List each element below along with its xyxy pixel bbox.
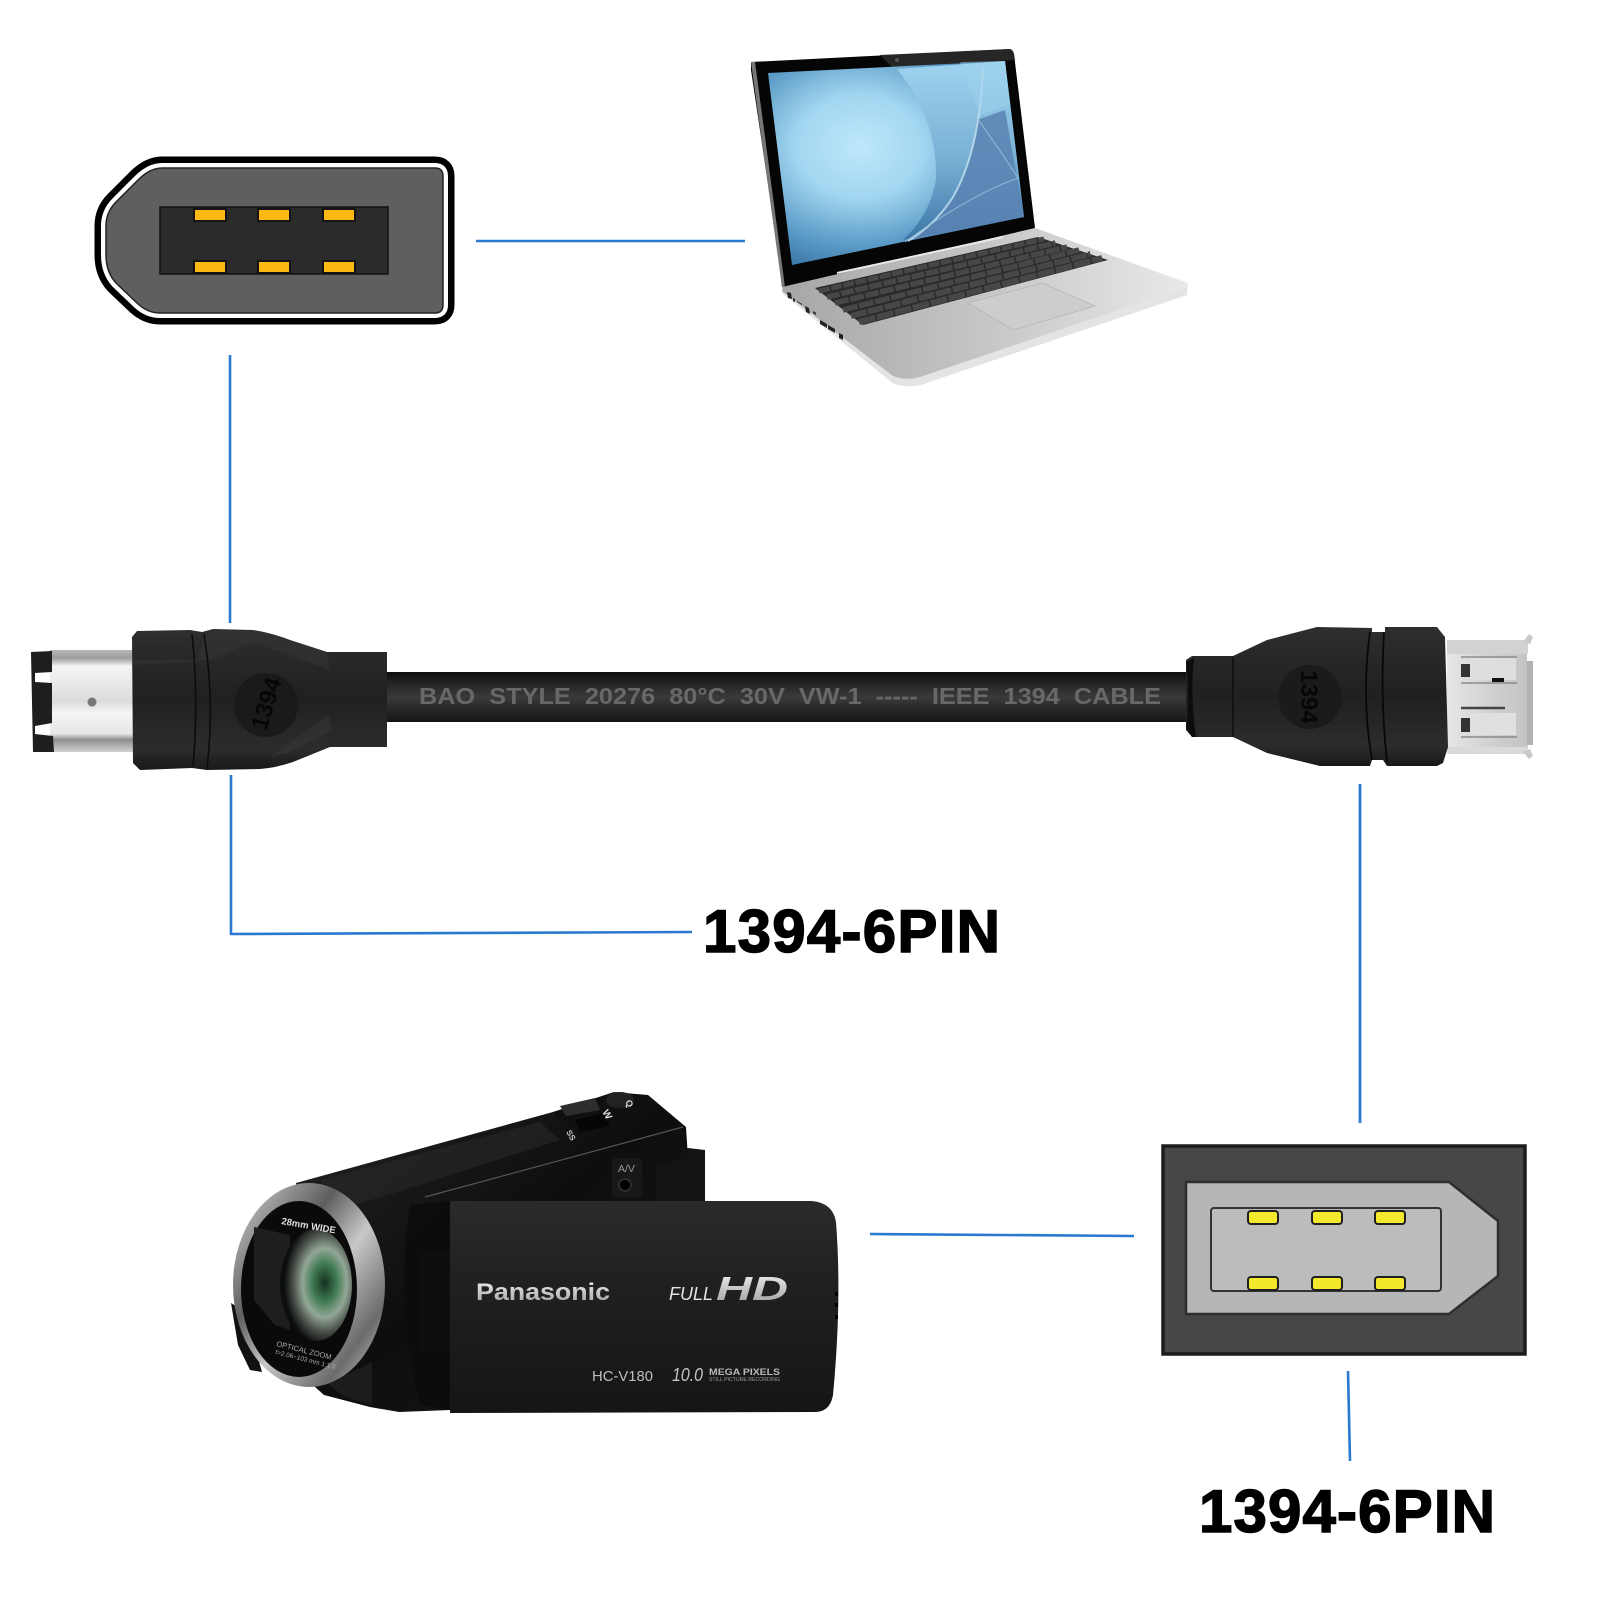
camcorder flip screen	[450, 1201, 838, 1413]
Panasonic logo: Panasonic	[476, 1279, 610, 1306]
camcorder top controls: SS	[564, 1128, 578, 1143]
camcorder A/V port	[612, 1158, 642, 1198]
camcorder lens face: f=2.06~103 mm 1:1.8	[275, 1349, 337, 1371]
megapixel text: 10.0	[672, 1365, 703, 1385]
connector line: right connector to right socket	[1359, 784, 1361, 1123]
laptop keyboard	[815, 237, 1108, 325]
laptop lid	[751, 49, 1035, 287]
icon: right 6-pin socket	[1163, 1146, 1525, 1354]
camcorder top controls	[553, 1092, 635, 1143]
connector line: left socket to plug	[229, 355, 231, 623]
label: left 1394-6PIN: 1394-6PIN	[703, 898, 1000, 965]
camcorder grip	[231, 1303, 262, 1372]
connector 1394 emboss: 1394	[1295, 670, 1322, 724]
label: right 1394-6PIN: 1394-6PIN	[1199, 1478, 1495, 1545]
Full HD logo: HD	[716, 1270, 788, 1307]
Full HD logo: FULL	[669, 1283, 713, 1304]
plug 1394 emboss: 1394	[246, 674, 288, 733]
megapixel text: MEGA PIXELS	[709, 1367, 780, 1378]
camcorder lens grille	[328, 1362, 372, 1405]
camcorder lens face: 28mm WIDE	[280, 1216, 336, 1236]
Full HD logo	[669, 1270, 788, 1307]
camcorder hinge	[420, 1252, 450, 1352]
plug boot	[132, 629, 387, 770]
camcorder top controls: Q	[623, 1098, 635, 1109]
connector boot	[1186, 627, 1448, 766]
connector metal shell	[1447, 634, 1533, 759]
laptop screen	[768, 61, 1024, 265]
left 6-pin plug	[31, 629, 387, 770]
icon: camcorder	[231, 1092, 838, 1413]
plug black tip	[31, 651, 54, 752]
camcorder lens face	[241, 1201, 357, 1377]
right 6-pin socket connector	[1186, 627, 1533, 766]
laptop hinge	[837, 237, 1003, 273]
plug metal shell	[50, 650, 134, 752]
laptop trackpad	[968, 283, 1095, 330]
connector slots	[1461, 664, 1470, 677]
megapixel text	[672, 1365, 780, 1385]
connector line: right socket to right label	[1348, 1371, 1350, 1461]
connector 1394 emboss	[1278, 665, 1342, 729]
laptop base	[782, 228, 1188, 386]
camcorder lens face: OPTICAL ZOOM	[276, 1339, 332, 1362]
connector line: plug to left label	[231, 775, 692, 934]
icon: laptop	[751, 49, 1188, 386]
cable printed text: BAO STYLE 20276 80°C 30V VW-1 ----- IEEE 1394 CABLE	[419, 683, 1161, 709]
camcorder A/V port: A/V	[618, 1163, 635, 1175]
model name: HC-V180	[592, 1368, 653, 1385]
camcorder top controls: W	[599, 1108, 614, 1122]
icon: left 6-pin socket	[106, 168, 443, 313]
cable	[385, 672, 1195, 722]
camcorder rear section	[640, 1148, 705, 1205]
camcorder body	[296, 1092, 688, 1412]
megapixel text: STILL PICTURE RECORDING	[709, 1377, 780, 1383]
speaker holes	[835, 1292, 838, 1319]
camcorder lens ring	[233, 1183, 385, 1387]
laptop ports	[787, 292, 843, 340]
plug 1394 emboss	[234, 673, 298, 737]
connector line: left socket to laptop	[476, 240, 745, 242]
connector line: camcorder to right socket	[870, 1234, 1134, 1236]
